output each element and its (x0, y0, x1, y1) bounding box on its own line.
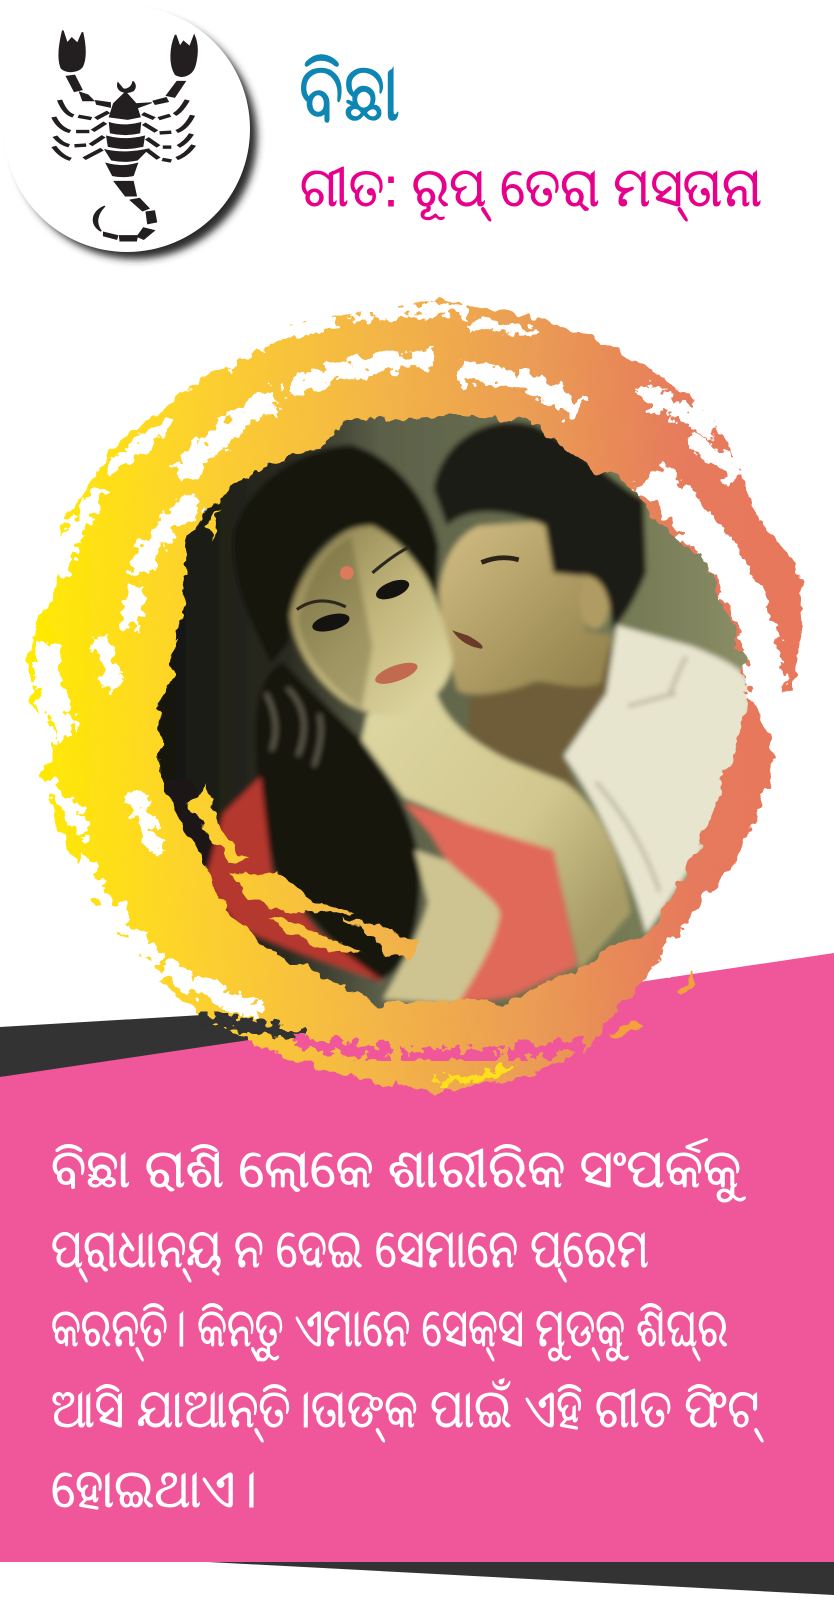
woman's face (290, 521, 452, 715)
title: ବିଛା (299, 47, 400, 138)
dark bottom band (170, 1560, 834, 1595)
text line 2: ପ୍ରାଧାନ୍ୟ ନ ଦେଇ ସେମାନେ ପ୍ରେମ (51, 1219, 649, 1282)
red blouse (404, 803, 577, 1004)
brush ring (29, 298, 803, 1093)
shirt folds (596, 657, 686, 892)
red sleeve (205, 777, 386, 983)
circular brushed photo frame (29, 298, 803, 1093)
dark top band (0, 1011, 560, 1077)
orange flakes on pink (604, 971, 697, 1042)
shirt (564, 625, 751, 934)
woman's long hair (255, 662, 420, 981)
yellow highlight in lower ring (436, 1067, 516, 1083)
icon: scorpion (54, 31, 197, 241)
face shadow (298, 536, 372, 709)
white brush flakes (48, 310, 766, 1010)
dark block left (162, 780, 176, 813)
woman's hair (233, 445, 439, 664)
hair highlights (266, 688, 321, 766)
text line 5: ହୋଇଥାଏ। (51, 1459, 257, 1519)
man's ear (580, 574, 610, 629)
badge disc (4, 6, 250, 252)
man's chest (468, 650, 610, 788)
chest skin (362, 693, 630, 970)
man's face (439, 521, 612, 694)
pink gap in lower ring (293, 1038, 588, 1055)
body text (51, 1138, 764, 1519)
badge shadow (13, 15, 257, 259)
subtitle: song name: ଗୀତ: ରୂପ୍ ତେରା ମସ୍ତାନା (300, 156, 762, 221)
zodiac badge (4, 6, 257, 259)
photo: couple (156, 413, 748, 1009)
text line 1: ବିଛା ରାଶି ଲୋକେ ଶାରୀରିକ ସଂପର୍କକୁ (51, 1138, 746, 1202)
photo backdrop (156, 413, 748, 1009)
woman's eyes, bindi and lips (297, 547, 519, 688)
pink text panel (0, 953, 834, 1562)
hand (383, 850, 500, 1004)
flames over photo (160, 510, 418, 960)
dark gap in lower ring (197, 1017, 303, 1036)
man's hair (434, 422, 646, 630)
